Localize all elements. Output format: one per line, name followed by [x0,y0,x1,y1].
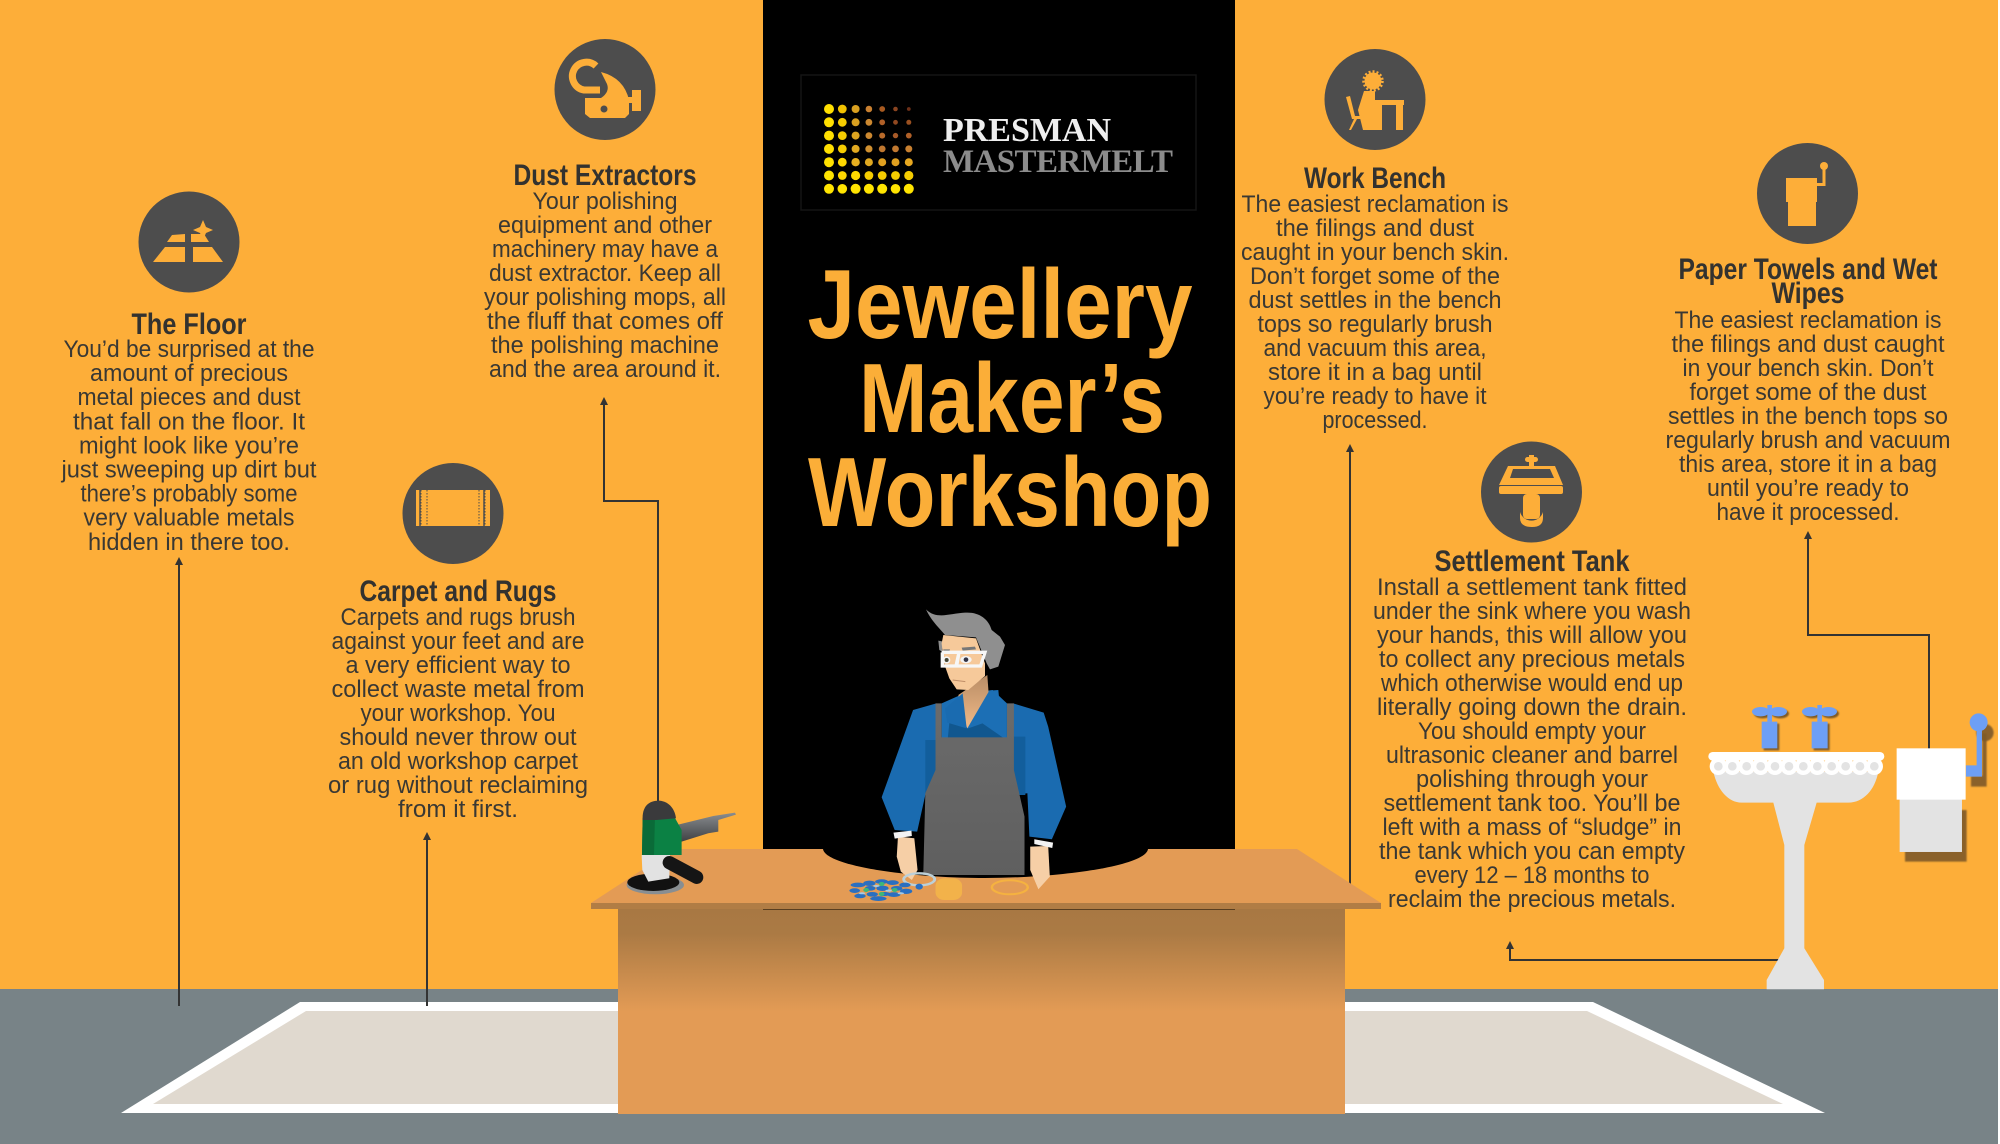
icon: sink [1481,442,1582,542]
pedestal [1713,772,1878,989]
heading and text: the floor: The Floor [132,308,247,341]
heading and text: settlement tank: which otherwise would end up [1380,670,1683,697]
heading and text: the floor: metal pieces and dust [78,384,301,411]
left cuff [893,831,912,839]
head [643,801,676,820]
icon: work bench [1324,49,1426,150]
title [808,249,1212,547]
heading and text: settlement tank: left with a mass of “sludge” in [1382,814,1682,841]
arrowhead: settlement tank [1506,941,1514,949]
right cuff [1034,839,1053,848]
arrow: carpet [426,837,428,1006]
side handle [669,863,697,877]
grinder on the desk [627,801,736,894]
brow [943,647,976,651]
arrowhead: work bench [1346,444,1354,452]
heading and text: paper towels and wet wipes: the filings and dust caught [1672,331,1945,358]
left hand [897,837,918,880]
gem cluster [849,879,923,901]
heading and text: work bench: you’re ready to have it [1264,383,1487,410]
logo: Presman Mastermelt: MASTERMELT [943,144,1173,180]
heading and text: carpet and rugs: Carpet and Rugs [360,575,556,608]
heading and text: paper towels and wet wipes: settles in the bench tops so [1668,403,1948,430]
heading and text: dust extractors: dust extractor. Keep all [489,260,721,287]
paper towel dispenser [1897,713,1994,862]
heading and text: settlement tank: under the sink where you wash [1373,598,1691,625]
heading and text: work bench: Don’t forget some of the [1250,263,1500,290]
worker head [926,609,1005,736]
heading and text: carpet and rugs: a very efficient way to [346,652,570,679]
arrow: paper towels [1808,536,1929,750]
carpet [121,1002,1825,1113]
heading and text: the floor: very valuable metals [84,505,294,532]
heading and text: paper towels and wet wipes [1666,253,1950,526]
left sleeve [882,703,936,832]
heading and text: paper towels and wet wipes: The easiest reclamation is [1674,307,1942,334]
arrow: settlement tank [1510,947,1780,960]
heading and text: paper towels and wet wipes: until you’re ready to [1707,475,1909,502]
sleeve shading [925,737,1025,795]
heading and text: paper towels and wet wipes: Paper Towels and Wet [1678,253,1938,286]
rear handle [677,813,736,842]
gold ring [992,880,1028,894]
arrowhead: carpet [423,832,431,840]
gold item [936,878,962,900]
heading and text: dust extractors: the polishing machine [491,332,719,359]
heading and text: carpet and rugs: from it first. [398,796,518,823]
icon: paper towels [1757,143,1858,244]
heading and text: settlement tank: your hands, this will allow you [1377,622,1687,649]
heading and text: settlement tank: You should empty your [1418,718,1646,745]
right sleeve [1013,703,1066,839]
towel top [1897,748,1966,800]
shirt front [942,690,1007,738]
logo: Presman Mastermelt [801,75,1196,210]
heading and text: work bench: and vacuum this area, [1264,335,1486,362]
heading and text: dust extractors [484,159,726,383]
heading and text: settlement tank: to collect any precious metals [1379,646,1685,673]
title: Maker’s [859,343,1165,453]
heading and text: paper towels and wet wipes: have it processed. [1716,499,1900,526]
heading and text: the floor [61,308,317,556]
shirt shadow [948,718,1004,738]
side hair [938,641,943,652]
arrow: dust extractor [604,402,658,802]
bangle [904,873,935,885]
heading and text: settlement tank: Settlement Tank [1434,545,1630,578]
collar [945,693,967,728]
heading and text: the floor: just sweeping up dirt but [61,456,317,484]
heading and text: settlement tank: the tank which you can empty [1379,838,1686,865]
heading and text: settlement tank: literally going down the drain. [1377,694,1687,721]
logo: Presman Mastermelt: PRESMAN [943,112,1111,149]
heading and text: dust extractors: Your polishing [532,188,678,215]
arrowhead: floor [175,557,183,565]
floor [0,989,1998,1144]
arrow: floor [178,562,180,1006]
heading and text: dust extractors: and the area around it. [489,356,721,383]
towel [1900,799,1962,852]
shadow [1905,724,1994,862]
collar right [967,690,1003,736]
basin rim [1708,752,1884,761]
mouth [953,680,965,682]
heading and text: paper towels and wet wipes: in your bench skin. Don’t [1682,355,1934,382]
heading and text: work bench: dust settles in the bench [1248,287,1502,314]
heading and text: paper towels and wet wipes: regularly brush and vacuum [1666,427,1950,454]
heading and text: settlement tank: reclaim the precious metals. [1388,886,1676,913]
heading and text: work bench: tops so regularly brush [1258,311,1492,338]
heading and text: settlement tank: ultrasonic cleaner and barrel [1386,742,1678,769]
heading and text: settlement tank: settlement tank too. You’ll be [1384,790,1680,817]
heading and text: dust extractors: equipment and other [498,212,712,239]
heading and text: settlement tank [1373,545,1691,913]
eyes [943,656,972,664]
desk [591,849,1381,1114]
heading and text: carpet and rugs: or rug without reclaiming [328,772,588,799]
heading and text: the floor: You’d be surprised at the [64,336,314,363]
heading and text: settlement tank: polishing through your [1416,766,1648,793]
icon: floor [138,192,240,292]
heading and text: work bench: The easiest reclamation is [1242,191,1508,218]
heading and text: the floor: there’s probably some [80,481,298,508]
tap shadows [1754,709,1839,750]
heading and text: the floor: hidden in there too. [88,529,290,556]
arm [1966,723,1982,777]
green body [642,815,682,855]
heading and text: work bench: processed. [1322,407,1428,434]
right hand [1030,846,1050,889]
icon: carpet [402,463,504,564]
heading and text: dust extractors: machinery may have a [492,236,718,263]
heading and text: paper towels and wet wipes: forget some of the dust [1690,379,1927,406]
heading and text: dust extractors: the fluff that comes off [487,308,723,335]
heading and text: carpet and rugs: collect waste metal from [332,676,584,703]
worker body [849,690,1066,901]
apron [923,703,1025,875]
goggles [942,652,985,666]
heading and text: carpet and rugs: against your feet and are [332,628,584,655]
heading and text: the floor: that fall on the floor. It [73,408,305,436]
scalloped edge [1710,758,1883,775]
heading and text: work bench: the filings and dust [1276,215,1474,242]
heading and text: carpet and rugs: your workshop. You [360,700,556,727]
disc [627,876,684,894]
title: Workshop [808,437,1212,547]
heading and text: work bench: store it in a bag until [1268,359,1482,386]
arrowhead: paper towels [1804,531,1812,539]
heading and text: settlement tank: Install a settlement tank fitted [1377,574,1687,601]
heading and text: carpet and rugs: Carpets and rugs brush [340,604,576,631]
heading and text: work bench: caught in your bench skin. [1241,239,1509,266]
heading and text: the floor: amount of precious [90,360,288,387]
neck [958,675,989,728]
heading and text: the floor: might look like you’re [79,432,299,460]
black centre panel [763,0,1235,860]
scallop dots [1714,762,1879,771]
heading and text: paper towels and wet wipes: Wipes [1772,277,1844,310]
heading and text: dust extractors: Dust Extractors [514,159,696,192]
body shading [642,817,655,855]
heading and text: carpet and rugs: an old workshop carpet [338,748,578,775]
icon: dust extractor [554,39,656,140]
hair [926,609,1005,669]
bonnet [642,855,670,882]
heading and text: carpet and rugs: should never throw out [340,724,577,751]
face [942,635,985,690]
heading and text: work bench [1241,162,1509,434]
heading and text: settlement tank: every 12 – 18 months to [1414,862,1650,889]
arrowhead: dust extractor [600,397,608,405]
heading and text: paper towels and wet wipes: this area, store it in a bag [1679,451,1937,478]
title: Jewellery [808,249,1192,359]
arrow: work bench [1349,449,1351,885]
heading and text: dust extractors: your polishing mops, all [484,284,726,311]
heading and text: carpet and rugs [328,575,588,823]
heading and text: work bench: Work Bench [1304,162,1446,195]
taps [1752,705,1837,748]
basin [1708,705,1884,989]
